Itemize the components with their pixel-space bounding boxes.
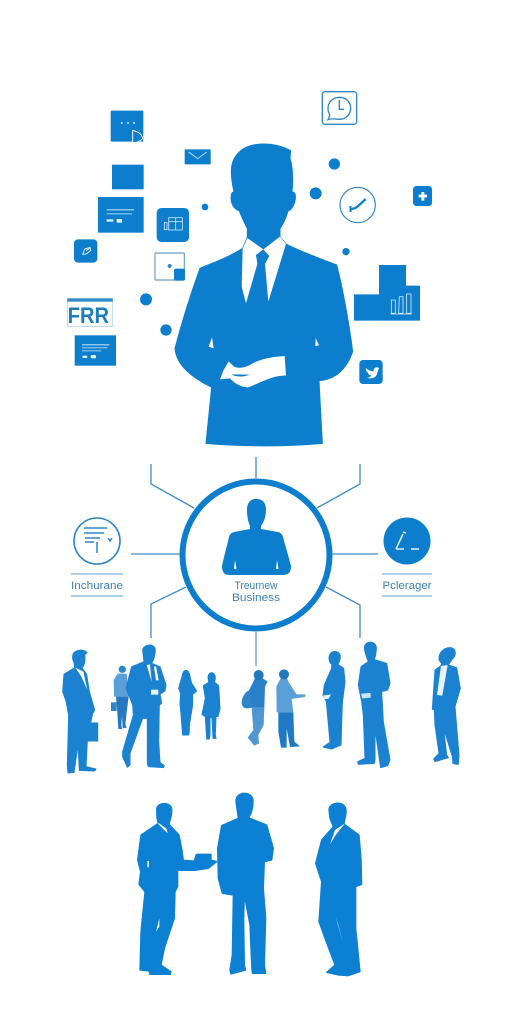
woman with curly hair: [432, 648, 460, 764]
left floating icons: [67, 111, 211, 366]
man on right: [316, 803, 362, 976]
woman with long hair: [179, 670, 197, 735]
icon: check circle: [340, 187, 375, 223]
main businessman silhouette: [175, 144, 353, 446]
icon: clock speech bubble: [322, 92, 357, 124]
walking man: [123, 645, 166, 768]
tall man: [358, 642, 390, 768]
central label: [232, 580, 281, 604]
icon: text card lower: [75, 335, 116, 366]
left node icon: [74, 518, 120, 564]
icon: dashboard tile: [157, 208, 189, 242]
icon: pen tile: [74, 239, 97, 263]
small dot: [202, 204, 208, 210]
right floating icons: [310, 92, 432, 384]
right arm gap: [315, 338, 319, 346]
dot: [342, 248, 350, 255]
right node label: Pclerager: [382, 580, 432, 592]
left node label: [71, 574, 123, 596]
hand and cuff: [220, 356, 286, 387]
woman in skirt: [202, 673, 220, 739]
central circle: [182, 482, 330, 628]
person with briefcase: [63, 650, 98, 773]
central label: Business: [232, 592, 281, 604]
shirt collar left: [242, 238, 263, 303]
left arm gap: [209, 337, 214, 348]
dot: [140, 293, 152, 305]
icon: plus tile: [413, 186, 432, 206]
dot: [310, 187, 322, 199]
central label: Treurnew: [234, 580, 278, 592]
man holding tablet: [138, 803, 217, 974]
crowd right group: [242, 642, 460, 768]
icon: text card: [98, 197, 144, 233]
icon: twitter tile: [359, 360, 383, 384]
icon: bar chart block: [354, 265, 420, 321]
central person icon: [222, 499, 291, 575]
icon: report card with pie: [111, 111, 143, 143]
bottom group of three men: [138, 793, 362, 976]
dot: [160, 324, 172, 336]
icon: outlined square with tile: [155, 253, 185, 281]
man in profile: [323, 651, 345, 749]
inner fold of hand: [231, 374, 249, 376]
icon: FRR banner: FRR: [68, 303, 109, 328]
connector lines: [131, 457, 378, 666]
man in centre: [218, 793, 273, 974]
right node label: [382, 574, 432, 596]
shirt collar right: [263, 237, 286, 302]
crowd left group: [63, 645, 220, 773]
person gesturing: [276, 669, 306, 748]
right node icon: [384, 518, 430, 564]
icon: blank card: [112, 165, 144, 189]
dot: [329, 158, 340, 170]
small person with bag: [111, 666, 129, 729]
icon: envelope: [185, 149, 211, 164]
person with bag: [242, 670, 268, 746]
left node label: Inchurane: [71, 580, 123, 592]
